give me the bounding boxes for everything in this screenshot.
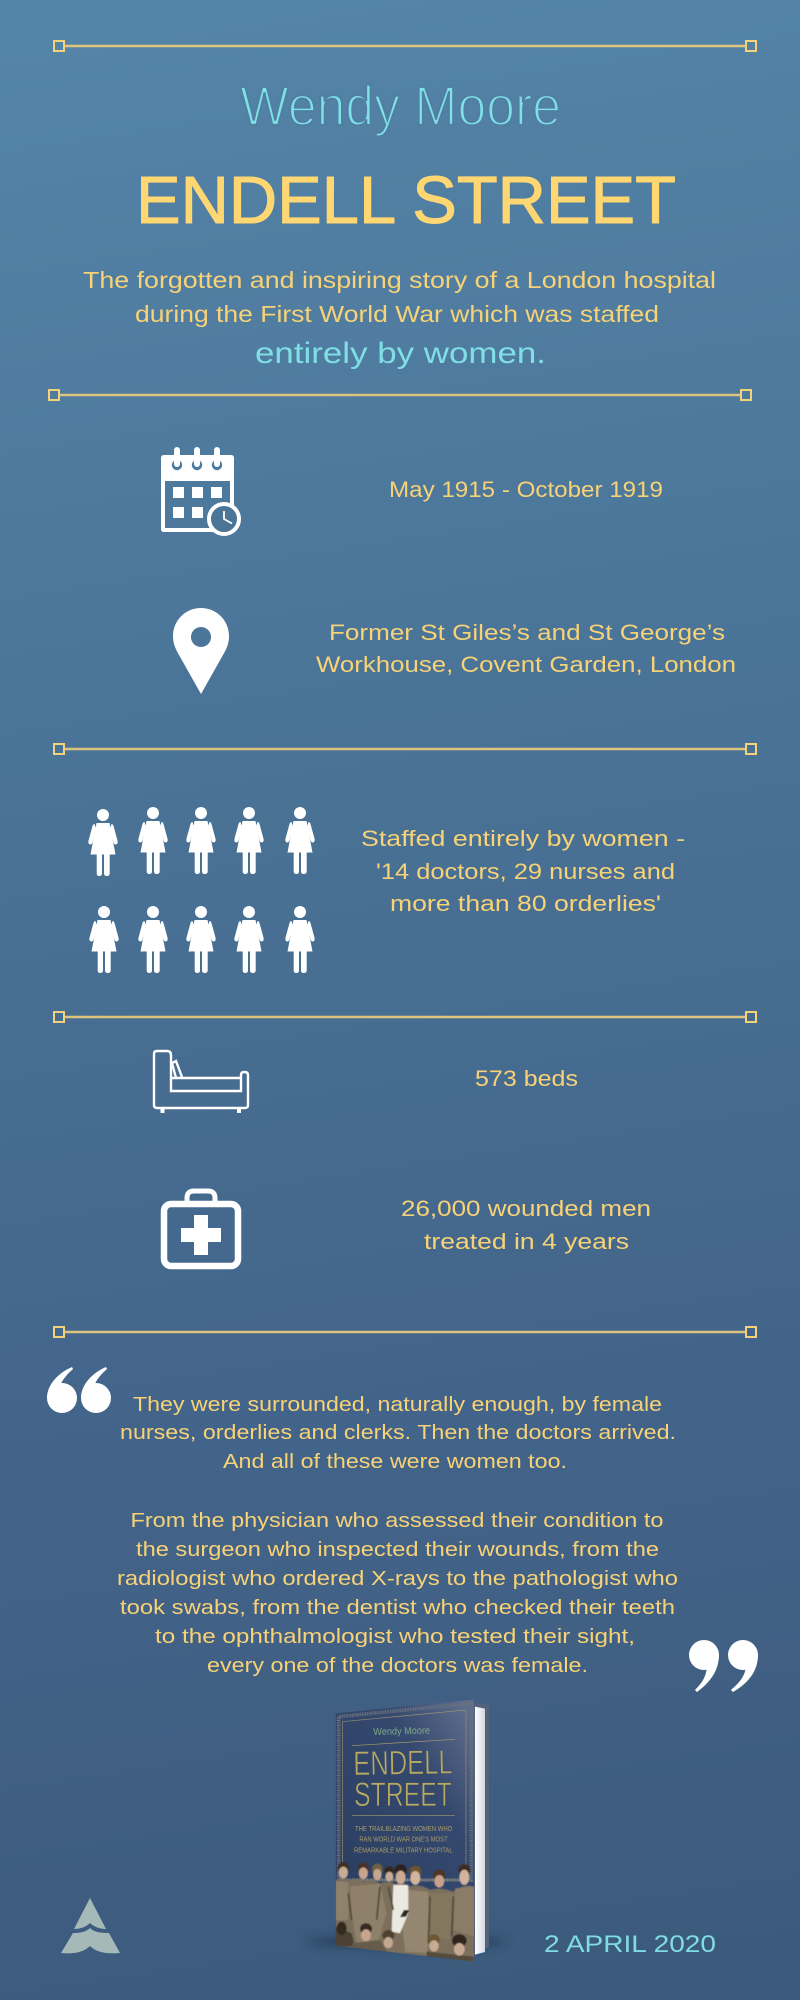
book cover text: STREET xyxy=(354,1776,452,1814)
book pages and back cover xyxy=(474,1703,489,1955)
divider: below staff xyxy=(54,1012,756,1022)
staff text: '14 doctors, 29 nurses and xyxy=(376,859,675,884)
quote text: From the physician who assessed their condition to xyxy=(130,1509,664,1532)
icon: ten women xyxy=(88,807,315,973)
publisher logo xyxy=(61,1898,120,1953)
staff text: more than 80 orderlies' xyxy=(390,891,661,916)
icon: bed xyxy=(154,1051,248,1113)
book cover text xyxy=(352,1726,455,1854)
quote text xyxy=(117,1393,678,1677)
quote text: took swabs, from the dentist who checked their teeth xyxy=(120,1596,675,1619)
title: ENDELL STREET xyxy=(136,163,676,238)
divider: below location xyxy=(54,744,756,754)
book cover text: ENDELL xyxy=(353,1743,453,1783)
intro text: during the First World War which was staffed xyxy=(135,301,659,327)
quote text: nurses, orderlies and clerks. Then the doctors arrived. xyxy=(120,1421,676,1444)
book cover image xyxy=(307,1699,507,1963)
staff text xyxy=(361,826,685,916)
icon: medical kit xyxy=(164,1191,238,1266)
divider: below intro xyxy=(49,390,751,400)
quote text: radiologist who ordered X-rays to the pathologist who xyxy=(117,1567,678,1590)
book cover text: REMARKABLE MILITARY HOSPITAL xyxy=(354,1845,453,1854)
icon: location pin xyxy=(173,608,229,694)
beds text: 573 beds xyxy=(475,1066,578,1091)
book cover text: RAN WORLD WAR ONE'S MOST xyxy=(359,1835,448,1844)
staff text: Staffed entirely by women - xyxy=(361,826,685,851)
wounded text: treated in 4 years xyxy=(424,1229,629,1254)
quote text: to the ophthalmologist who tested their sight, xyxy=(155,1625,635,1648)
icon: calendar with clock xyxy=(161,447,239,534)
location text: Former St Giles’s and St George’s xyxy=(329,620,725,645)
book cover text: Wendy Moore xyxy=(373,1726,431,1738)
intro text xyxy=(83,267,716,370)
quote text: They were surrounded, naturally enough, by female xyxy=(133,1393,662,1416)
dates text: May 1915 - October 1919 xyxy=(389,477,663,502)
book photo of staff xyxy=(336,1862,474,1963)
book front cover xyxy=(336,1699,474,1963)
quote text: And all of these were women too. xyxy=(223,1450,567,1473)
location text: Workhouse, Covent Garden, London xyxy=(316,652,736,677)
divider: top xyxy=(54,41,756,51)
quote text: every one of the doctors was female. xyxy=(207,1654,588,1677)
divider: above quote xyxy=(54,1327,756,1337)
icon: opening quotation mark xyxy=(47,1367,111,1413)
icon: closing quotation mark xyxy=(689,1640,758,1692)
intro text: The forgotten and inspiring story of a London hospital xyxy=(83,267,716,293)
intro text: entirely by women. xyxy=(255,337,546,370)
book shadow xyxy=(307,1934,507,1949)
location text xyxy=(316,620,736,677)
wounded text: 26,000 wounded men xyxy=(401,1196,651,1221)
publication date: 2 APRIL 2020 xyxy=(544,1931,716,1958)
wounded text xyxy=(401,1196,651,1254)
book cover text: THE TRAILBLAZING WOMEN WHO xyxy=(355,1824,453,1833)
author name: Wendy Moore xyxy=(240,74,561,137)
quote text: the surgeon who inspected their wounds, from the xyxy=(136,1538,659,1561)
